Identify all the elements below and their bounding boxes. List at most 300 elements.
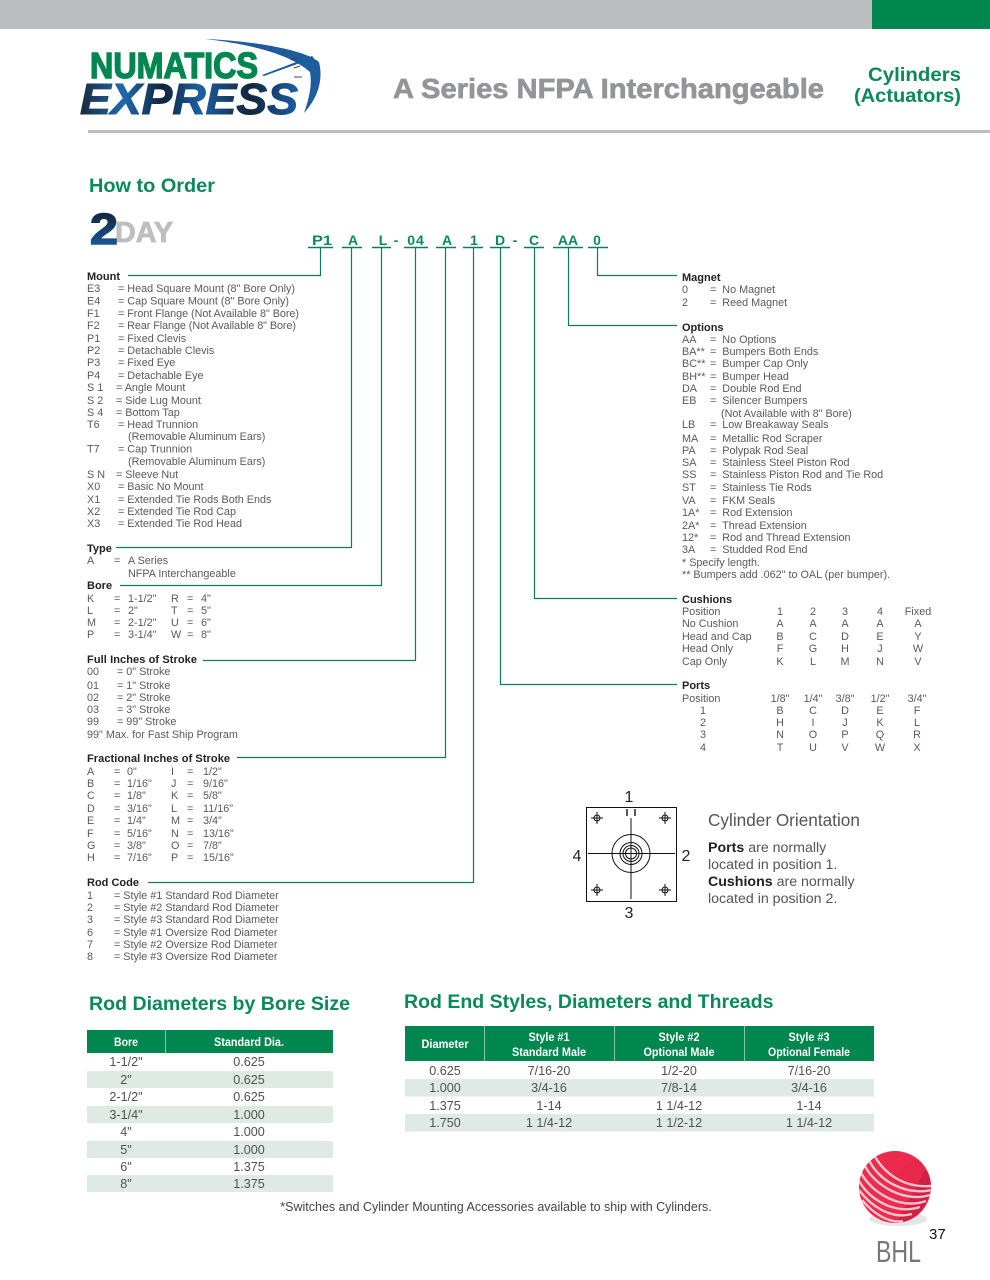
panel: Fractional Inches of Stroke: 7/16" (127, 852, 152, 864)
panel: Fractional Inches of Stroke: = (187, 790, 193, 802)
icon: 2 Day logo: 2 (90, 205, 118, 254)
panel: Fractional Inches of Stroke: 1/4" (127, 815, 146, 827)
icon: BHL globe logo: BHL (876, 1234, 921, 1269)
table: rod end styles: Optional Male (644, 1045, 715, 1059)
panel: Options: SS (682, 469, 696, 481)
panel: Bore: 2-1/2" (128, 617, 157, 629)
panel: Mount: F2 (87, 320, 100, 332)
panel: Mount: S 1 (87, 382, 103, 394)
panel: Mount: = Detachable Clevis (118, 345, 215, 357)
table: rod diameters by bore size: Standard Dia. (214, 1035, 284, 1049)
panel: Bore: K (87, 593, 95, 605)
panel: Fractional Inches of Stroke: = (187, 840, 193, 852)
panel: Cushions: E (876, 631, 884, 643)
panel: Ports: B (776, 705, 784, 717)
panel: Fractional Inches of Stroke: = (114, 766, 120, 778)
page title: A Series NFPA Interchangeable (393, 73, 824, 104)
panel: Full Inches of Stroke: = 1" Stroke (117, 680, 170, 692)
panel: Cushions: V (914, 656, 922, 668)
panel: Full Inches of Stroke: 99" Max. for Fast Ship Program (87, 729, 238, 741)
logo: Numatics Express (80, 39, 321, 124)
panel: Bore: = (187, 605, 193, 617)
panel: Mount: F1 (87, 308, 100, 320)
table: rod end styles: Standard Male (512, 1045, 586, 1059)
panel: Fractional Inches of Stroke: = (187, 803, 193, 815)
panel: Type: NFPA Interchangeable (128, 568, 236, 580)
panel: Ports: C (809, 705, 817, 717)
panel: Ports: L (914, 717, 920, 729)
panel: Fractional Inches of Stroke: = (187, 766, 193, 778)
diagram: cylinder orientation (573, 789, 691, 922)
panel: Bore: 8" (201, 629, 211, 641)
panel: Options: = Stainless Steel Piston Rod (710, 457, 850, 469)
text: Cylinder Orientation: Ports are normally (708, 840, 827, 856)
table: rod end styles: Diameter (422, 1037, 469, 1051)
panel: Fractional Inches of Stroke: 3/4" (203, 815, 222, 827)
panel: Fractional Inches of Stroke: 9/16" (203, 778, 228, 790)
panel: Ports: 1/8" (771, 693, 790, 705)
table: rod diameters by bore size: 8" (120, 1177, 132, 1191)
panel: Magnet: = No Magnet (710, 284, 775, 296)
panel: Options: BH** (682, 371, 706, 383)
order code: - (513, 232, 518, 248)
panel: Mount: T7 (87, 444, 100, 456)
panel: Mount: = Fixed Eye (118, 357, 175, 369)
panel: Bore: 2" (128, 605, 138, 617)
panel: Fractional Inches of Stroke: = (114, 790, 120, 802)
panel: Ports: 4 (700, 742, 706, 754)
panel: Mount: P4 (87, 370, 100, 382)
panel: Mount: E4 (87, 296, 100, 308)
table: rod diameters by bore size: 2-1/2" (109, 1090, 143, 1104)
panel: Bore: 5" (201, 605, 211, 617)
panel: Ports: 3/4" (908, 693, 927, 705)
panel: Mount: = Extended Tie Rod Cap (118, 506, 236, 518)
panel: Fractional Inches of Stroke: = (187, 815, 193, 827)
panel: Full Inches of Stroke: 03 (87, 704, 99, 716)
panel: Rod Code: 1 (87, 890, 93, 902)
table: rod end styles: Style #2 (658, 1030, 700, 1044)
panel: Cushions: D (841, 631, 849, 643)
panel: Ports: U (809, 742, 817, 754)
panel: Mount: = Rear Flange (Not Available 8" Bore) (118, 320, 296, 332)
panel: Rod Code: 8 (87, 951, 93, 963)
icon: 2 Day logo: DAY (115, 217, 173, 249)
panel: Rod Code: 7 (87, 939, 93, 951)
panel: Fractional Inches of Stroke: = (114, 803, 120, 815)
table: rod end styles: 3/4-16 (791, 1081, 827, 1095)
panel: Cushions: Head Only (682, 643, 734, 655)
panel: Ports: N (776, 729, 784, 741)
panel: Bore: = (114, 605, 120, 617)
panel: Mount: Mount (87, 271, 120, 283)
panel: Cushions: Fixed (905, 606, 931, 618)
panel: Magnet: = Reed Magnet (710, 297, 787, 309)
table: rod end styles: 0.625 (429, 1064, 461, 1078)
panel: Cushions: Position (682, 606, 720, 618)
panel: Options: 1A* (682, 507, 700, 519)
panel: Options: = Bumper Head (710, 371, 789, 383)
panel: Rod Code: 3 (87, 914, 93, 926)
panel: Full Inches of Stroke: 01 (87, 680, 99, 692)
panel: Full Inches of Stroke: = 3" Stroke (117, 704, 170, 716)
panel: Ports: Position (682, 693, 720, 705)
panel: Rod Code: = Style #2 Standard Rod Diameter (114, 902, 279, 914)
panel: Fractional Inches of Stroke: K (171, 790, 179, 802)
panel: Options: = Bumpers Both Ends (710, 346, 819, 358)
panel: Bore: = (187, 593, 193, 605)
panel: Cushions: L (810, 656, 816, 668)
table: rod end styles: 1.750 (429, 1116, 461, 1130)
panel: Options: = Stainless Piston Rod and Tie Rod (710, 469, 883, 481)
panel: Mount (87, 271, 299, 530)
panel: Ports: 1/2" (871, 693, 890, 705)
table: rod end styles: 1-14 (796, 1099, 822, 1113)
panel: Bore: = (114, 617, 120, 629)
table: rod end styles: 1/2-20 (661, 1064, 697, 1078)
panel: Ports: V (841, 742, 849, 754)
panel: Fractional Inches of Stroke: 0" (127, 766, 137, 778)
panel: Rod Code: Rod Code (87, 877, 139, 889)
panel: Cushions: F (777, 643, 784, 655)
panel: Mount: S 4 (87, 407, 103, 419)
panel: Mount: (Removable Aluminum Ears) (128, 456, 265, 468)
panel: Ports: 1 (700, 705, 706, 717)
panel: Options: = Thread Extension (710, 520, 807, 532)
panel: Options: VA (682, 495, 696, 507)
icon: 2 Day logo (90, 205, 173, 254)
panel: Ports: P (841, 729, 849, 741)
panel: Bore: 3-1/4" (128, 629, 157, 641)
panel: Options: DA (682, 383, 698, 395)
panel: Mount: = Head Square Mount (8" Bore Only) (118, 283, 295, 295)
panel: Fractional Inches of Stroke: O (171, 840, 179, 852)
panel: Options: 3A (682, 544, 696, 556)
panel: Rod Code (87, 877, 279, 963)
order code: - (394, 232, 399, 248)
panel: Fractional Inches of Stroke: = (114, 815, 120, 827)
table: rod diameters by bore size: 1-1/2" (109, 1055, 143, 1069)
panel: Full Inches of Stroke: 99 (87, 716, 99, 728)
panel: Ports: X (913, 742, 921, 754)
panel: Options: Options (682, 322, 724, 334)
panel: Fractional Inches of Stroke: 7/8" (203, 840, 222, 852)
order code: AA (558, 232, 578, 248)
panel: Bore: 4" (201, 593, 211, 605)
panel: Options: LB (682, 419, 695, 431)
panel: Fractional Inches of Stroke: E (87, 815, 94, 827)
table: rod diameters by bore size: 1.000 (233, 1108, 265, 1122)
panel: Cushions: 4 (877, 606, 883, 618)
order code: A (442, 232, 452, 248)
panel: Rod Code: = Style #3 Oversize Rod Diameter (114, 951, 278, 963)
panel: Fractional Inches of Stroke (87, 753, 234, 864)
order code: C (529, 232, 539, 248)
panel: Ports: F (914, 705, 921, 717)
panel: Mount: T6 (87, 419, 100, 431)
panel: Fractional Inches of Stroke: P (171, 852, 178, 864)
panel: Magnet: Magnet (682, 272, 721, 284)
logo: Numatics Express: EXPRESS (80, 75, 298, 124)
panel: Ports: E (876, 705, 884, 717)
panel: Cushions: A (876, 618, 884, 630)
panel: Cushions: H (841, 643, 849, 655)
panel: Ports: 3 (700, 729, 706, 741)
panel: Fractional Inches of Stroke: 5/16" (127, 828, 152, 840)
panel: Ports: K (876, 717, 884, 729)
order code: 1 (470, 232, 478, 248)
panel: Magnet (682, 272, 787, 309)
panel: Options: = Double Rod End (710, 383, 802, 395)
panel: Mount: = Angle Mount (116, 382, 185, 394)
panel: Ports: O (809, 729, 817, 741)
table: rod end styles: 1.375 (429, 1099, 461, 1113)
panel: Fractional Inches of Stroke: C (87, 790, 95, 802)
panel: Cushions: M (840, 656, 850, 668)
panel: Mount: X3 (87, 518, 100, 530)
panel: Ports: T (777, 742, 784, 754)
panel: Full Inches of Stroke (87, 654, 238, 741)
icon: BHL globe logo (859, 1150, 932, 1269)
diagram: cylinder orientation: 4 (573, 848, 582, 865)
panel: Fractional Inches of Stroke: I (171, 766, 174, 778)
panel: Options: = Bumper Cap Only (710, 358, 809, 370)
panel: Fractional Inches of Stroke: G (87, 840, 95, 852)
table: rod diameters by bore size: 0.625 (233, 1073, 265, 1087)
order code: 04 (407, 232, 425, 248)
panel: Bore: L (87, 605, 93, 617)
panel: Options: EB (682, 395, 696, 407)
section label: Cylinders (Actuators): (Actuators) (854, 86, 961, 107)
panel: Cushions: Cap Only (682, 656, 728, 668)
panel: Full Inches of Stroke: = 0" Stroke (117, 666, 170, 678)
text: Cylinder Orientation: Cushions are normally (708, 874, 856, 890)
panel: Options: (Not Available with 8" Bore) (721, 408, 852, 420)
panel: Options: 12* (682, 532, 699, 544)
panel: Mount: = Detachable Eye (118, 370, 204, 382)
panel: Fractional Inches of Stroke: 1/16" (127, 778, 152, 790)
table: rod end styles: 1.000 (429, 1081, 461, 1095)
panel: Fractional Inches of Stroke: 1/2" (203, 766, 222, 778)
panel: Bore: W (171, 629, 182, 641)
panel: Options: = Metallic Rod Scraper (710, 433, 823, 445)
panel: Rod Code: = Style #1 Oversize Rod Diameter (114, 927, 278, 939)
panel: Mount: = Cap Trunnion (118, 444, 192, 456)
panel: Mount: P1 (87, 333, 100, 345)
panel: Cushions: N (876, 656, 884, 668)
text: Cylinder Orientation: Cylinder Orientation (708, 810, 860, 830)
panel: Bore: R (171, 593, 179, 605)
table: rod end styles: Optional Female (768, 1045, 850, 1059)
panel: Mount: = Bottom Tap (116, 407, 180, 419)
table: rod end styles: 1 1/4-12 (526, 1116, 572, 1130)
panel: Mount: E3 (87, 283, 100, 295)
panel: Options: PA (682, 445, 696, 457)
order code: D (495, 232, 505, 248)
panel: Bore: 1-1/2" (128, 593, 157, 605)
panel: Rod Code: = Style #3 Standard Rod Diameter (114, 914, 279, 926)
panel: Mount: X1 (87, 494, 100, 506)
panel: Fractional Inches of Stroke: 13/16" (203, 828, 234, 840)
panel: Bore: = (187, 629, 193, 641)
panel: Mount: X2 (87, 506, 100, 518)
panel: Mount: S N (87, 469, 105, 481)
footnote: *Switches and Cylinder Mounting Accessories available to ship with Cylinders. (280, 1200, 712, 1214)
panel: Bore: = (114, 593, 120, 605)
panel: Magnet: 2 (682, 297, 688, 309)
table: rod diameters by bore size (87, 1030, 333, 1192)
table: rod diameters by bore size: 4" (120, 1125, 132, 1139)
table: rod diameters by bore size: 0.625 (233, 1055, 265, 1069)
panel: Fractional Inches of Stroke: = (187, 828, 193, 840)
panel: Mount: = Sleeve Nut (116, 469, 178, 481)
panel: Fractional Inches of Stroke: B (87, 778, 94, 790)
panel: Fractional Inches of Stroke: H (87, 852, 95, 864)
panel: Cushions: B (776, 631, 784, 643)
table: rod end styles: 1 1/2-12 (656, 1116, 702, 1130)
panel: Bore: Bore (87, 580, 112, 592)
table: rod diameters by bore size: 3-1/4" (109, 1108, 143, 1122)
panel: Options: = Studded Rod End (710, 544, 808, 556)
order code: A (348, 232, 358, 248)
panel: Options: = Rod Extension (710, 507, 793, 519)
table: rod end styles: 3/4-16 (531, 1081, 567, 1095)
panel: Mount: = Extended Tie Rods Both Ends (118, 494, 272, 506)
panel: Options: = Polypak Rod Seal (710, 445, 808, 457)
panel: Ports: 2 (700, 717, 706, 729)
panel: Options: AA (682, 334, 697, 346)
panel: Rod Code: = Style #1 Standard Rod Diameter (114, 890, 279, 902)
panel: Fractional Inches of Stroke: 11/16" (203, 803, 233, 815)
panel: Cushions: Head and Cap (682, 631, 752, 643)
panel: Magnet: 0 (682, 284, 688, 296)
table: rod end styles: 1 1/4-12 (786, 1116, 832, 1130)
panel: Options (682, 322, 890, 581)
connector lines (116, 248, 677, 882)
table: rod diameters by bore size: 5" (120, 1143, 132, 1157)
panel: Cushions: A (914, 618, 922, 630)
panel: Cushions: Cushions (682, 594, 732, 606)
table: rod diameters by bore size: 1.000 (233, 1125, 265, 1139)
heading: Rod End Styles: Rod End Styles, Diameters and Threads (404, 991, 774, 1013)
panel: Mount: = Side Lug Mount (116, 395, 201, 407)
text: Cylinder Orientation (708, 810, 860, 907)
panel: Bore: T (171, 605, 178, 617)
panel: Ports: J (842, 717, 848, 729)
panel: Fractional Inches of Stroke: N (171, 828, 179, 840)
panel: Mount: X0 (87, 481, 100, 493)
diagram: cylinder orientation: 3 (625, 905, 634, 922)
panel: Full Inches of Stroke: = 99" Stroke (117, 716, 176, 728)
panel: Ports: R (913, 729, 921, 741)
panel: Ports: D (841, 705, 849, 717)
diagram: cylinder orientation: 1 (625, 789, 634, 806)
table: rod end styles: 1-14 (536, 1099, 562, 1113)
panel: Type: A (87, 555, 95, 567)
panel: Fractional Inches of Stroke: 5/8" (203, 790, 222, 802)
panel: Type: A Series (128, 555, 169, 567)
panel: Cushions: 2 (810, 606, 816, 618)
panel: Fractional Inches of Stroke: = (114, 840, 120, 852)
order code (312, 232, 601, 248)
table: rod diameters by bore size: 0.625 (233, 1090, 265, 1104)
table: rod end styles: 7/16-20 (528, 1064, 570, 1078)
panel: Fractional Inches of Stroke: = (114, 852, 120, 864)
table: rod diameters by bore size: 1.375 (233, 1177, 265, 1191)
table: rod end styles: 7/16-20 (788, 1064, 830, 1078)
panel: Rod Code: = Style #2 Oversize Rod Diameter (114, 939, 278, 951)
section label: Cylinders (Actuators): Cylinders (868, 65, 961, 86)
table: rod diameters by bore size: 2" (120, 1073, 132, 1087)
panel: Type: Type (87, 543, 112, 555)
panel: Fractional Inches of Stroke: L (171, 803, 177, 815)
panel: Cushions: G (809, 643, 817, 655)
panel: Fractional Inches of Stroke: = (114, 778, 120, 790)
panel: Mount: S 2 (87, 395, 103, 407)
panel: Full Inches of Stroke: = 2" Stroke (117, 692, 170, 704)
panel: Options: MA (682, 433, 699, 445)
panel: Cushions: J (877, 643, 883, 655)
text: Cylinder Orientation: located in position 2. (708, 891, 837, 907)
logo: Numatics Express: NUMATICS (90, 45, 258, 86)
panel: Cushions: C (809, 631, 817, 643)
panel: Options: 2A* (682, 520, 700, 532)
panel: Full Inches of Stroke: 02 (87, 692, 99, 704)
panel: Cushions: A (776, 618, 784, 630)
panel: Ports: 1/4" (804, 693, 823, 705)
heading: How to Order: How to Order (89, 175, 215, 197)
panel: Mount: = Front Flange (Not Available 8" Bore) (118, 308, 299, 320)
panel: Cushions: A (809, 618, 817, 630)
panel: Fractional Inches of Stroke: 3/8" (127, 840, 146, 852)
panel: Bore: = (114, 629, 120, 641)
order code: L (379, 232, 388, 248)
panel: Fractional Inches of Stroke: = (187, 778, 193, 790)
panel: Ports: H (776, 717, 784, 729)
panel: Fractional Inches of Stroke: M (171, 815, 180, 827)
panel: Type (87, 543, 236, 580)
panel: Fractional Inches of Stroke: = (187, 852, 193, 864)
panel: Cushions (682, 594, 931, 668)
panel: Fractional Inches of Stroke: F (87, 828, 94, 840)
panel: Mount: = Fixed Clevis (118, 333, 187, 345)
panel: Type: = (114, 555, 120, 567)
panel: Ports: W (875, 742, 886, 754)
panel: Rod Code: 2 (87, 902, 93, 914)
panel: Bore: = (187, 617, 193, 629)
panel: Options: = Stainless Tie Rods (710, 482, 812, 494)
page number: 37 (929, 1226, 946, 1243)
panel: Ports: Ports (682, 680, 710, 692)
panel: Full Inches of Stroke: Full Inches of Stroke (87, 654, 197, 666)
panel: Rod Code: 6 (87, 927, 93, 939)
panel: Bore: M (87, 617, 96, 629)
section label: Cylinders (Actuators) (854, 65, 961, 107)
panel: Options: = Rod and Thread Extension (710, 532, 851, 544)
table: rod end styles (405, 1026, 874, 1132)
panel: Ports: Q (876, 729, 884, 741)
panel: Cushions: No Cushion (682, 618, 738, 630)
panel: Fractional Inches of Stroke: J (171, 778, 176, 790)
panel: Cushions: W (913, 643, 924, 655)
diagram: cylinder orientation: 2 (682, 848, 691, 865)
panel: Options: = FKM Seals (710, 495, 776, 507)
panel: Options: * Specify length. (682, 557, 760, 569)
panel: Bore: 6" (201, 617, 211, 629)
text: Cylinder Orientation: located in position 1. (708, 857, 837, 873)
panel: Fractional Inches of Stroke: 15/16" (203, 852, 234, 864)
panel: Mount: = Cap Square Mount (8" Bore Only) (118, 296, 289, 308)
